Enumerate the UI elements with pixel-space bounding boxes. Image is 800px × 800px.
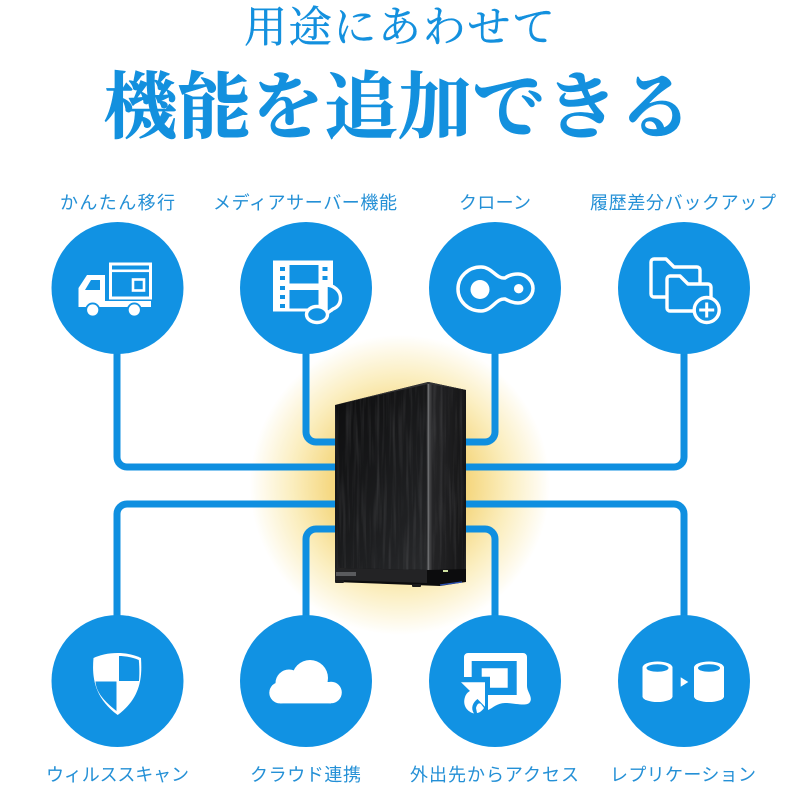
NAS device <box>335 382 466 587</box>
icon: cloud <box>269 660 342 703</box>
bottom circles <box>52 615 750 747</box>
top circles <box>52 222 750 354</box>
icon: folders with plus <box>651 259 719 322</box>
label: ウィルススキャン: ウィルススキャン <box>46 765 189 785</box>
connector lines <box>117 340 684 690</box>
label: メディアサーバー機能: メディアサーバー機能 <box>213 193 397 213</box>
label: クローン: クローン <box>459 193 531 213</box>
title line 1: 用途にあわせて <box>244 5 555 52</box>
icon: remote access <box>461 653 531 714</box>
icon: film and music note <box>273 260 340 322</box>
icon: shield <box>93 653 141 715</box>
label: かんたん移行: かんたん移行 <box>60 193 175 213</box>
label: 履歴差分バックアップ: 履歴差分バックアップ <box>590 193 776 213</box>
icon: replication drives <box>642 662 724 702</box>
label: クラウド連携: クラウド連携 <box>250 765 361 785</box>
label: レプリケーション: レプリケーション <box>610 765 756 785</box>
title line 2: 機能を追加できる <box>104 67 692 148</box>
label: 外出先からアクセス: 外出先からアクセス <box>410 765 579 785</box>
glow behind device <box>250 335 550 635</box>
icon: clone <box>458 267 533 311</box>
icon: moving truck <box>78 264 151 318</box>
